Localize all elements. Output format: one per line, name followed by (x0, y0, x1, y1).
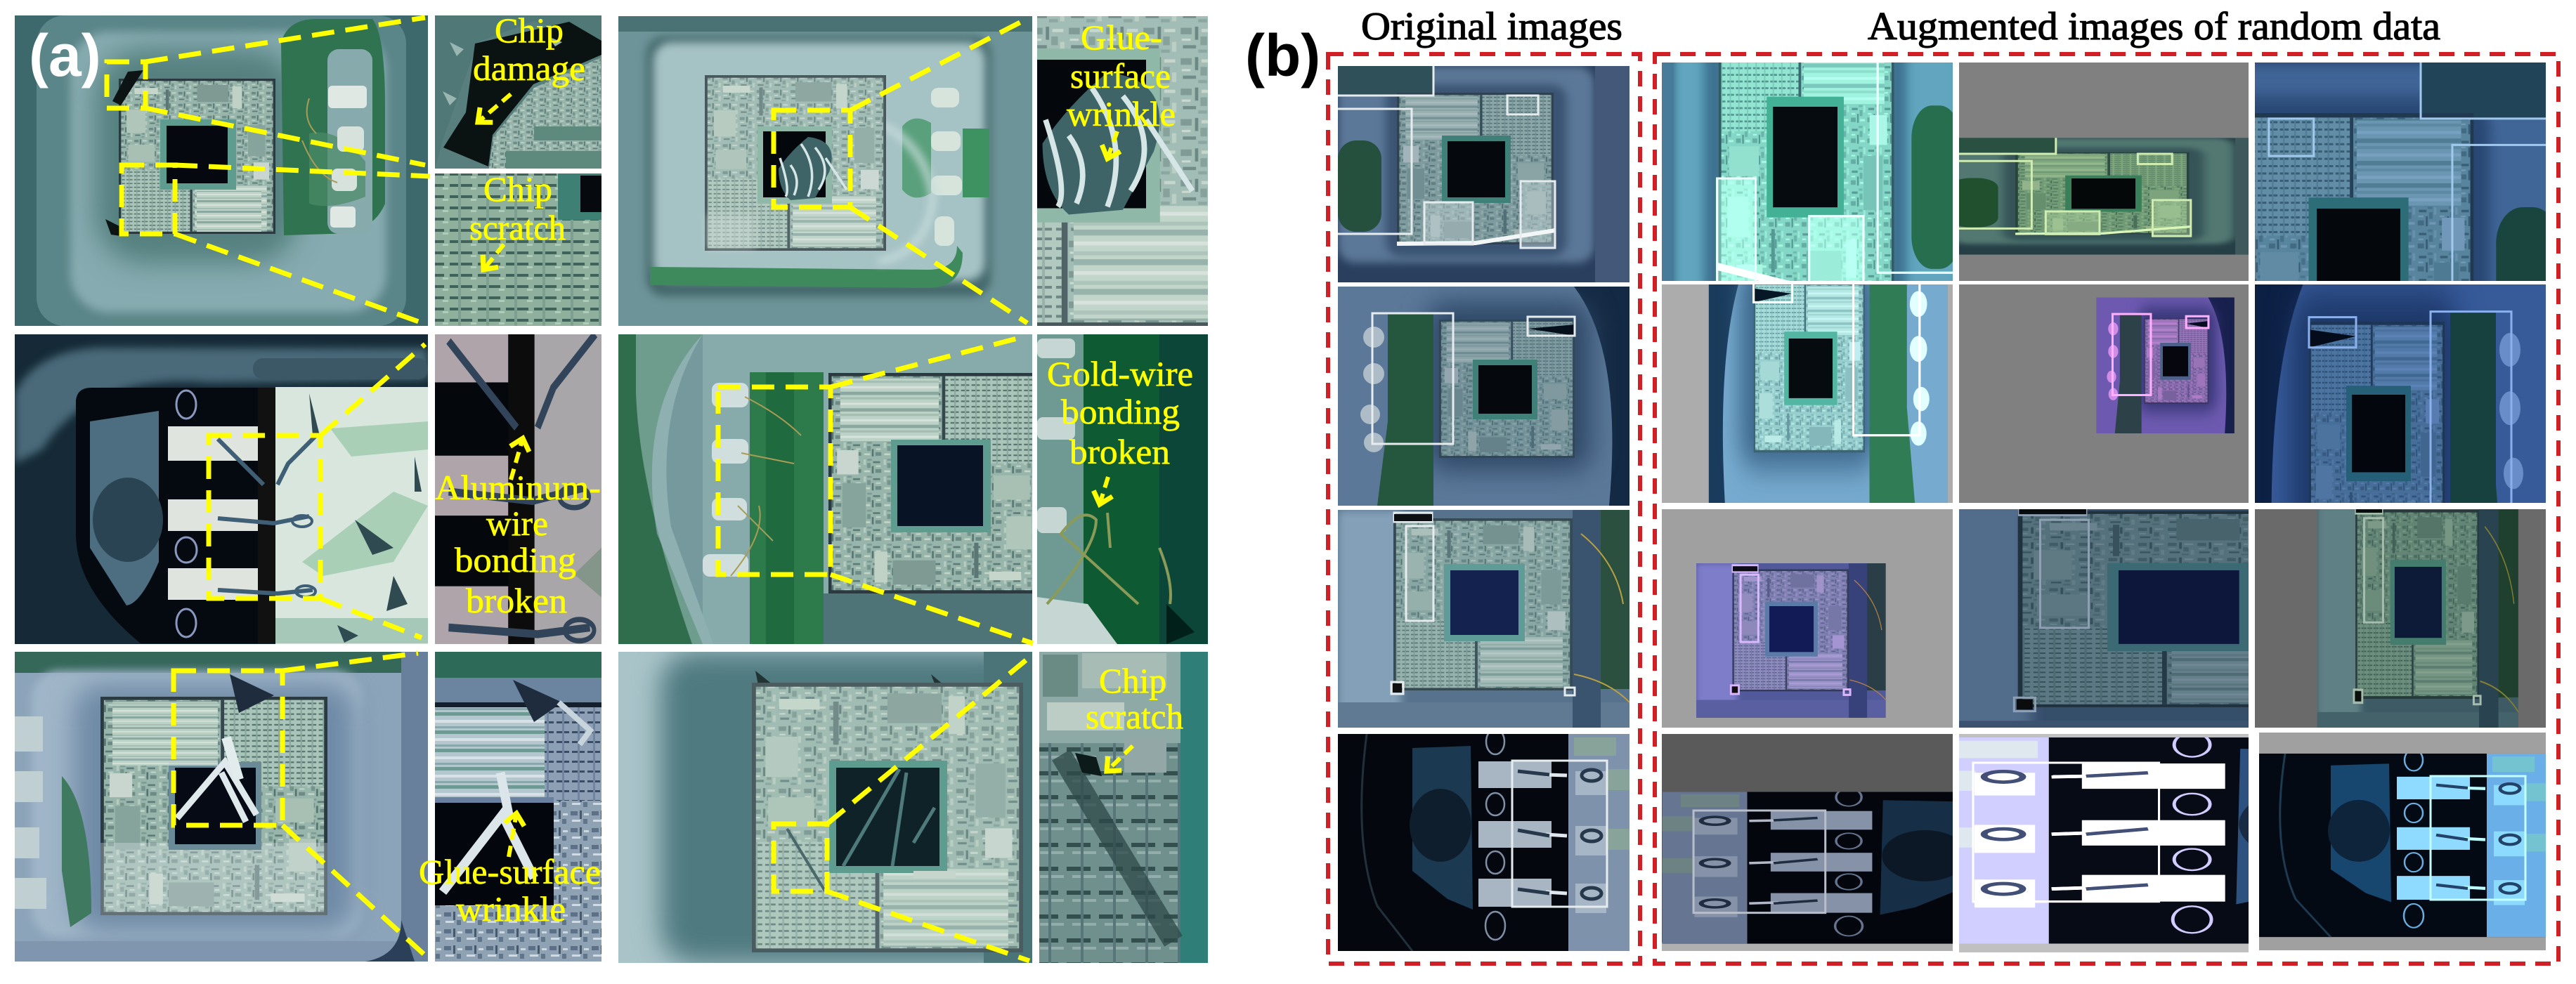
heading: Augmented images of random data: Augmented images of random data (1868, 5, 2440, 48)
original image row 2 (1338, 287, 1629, 506)
annotation: Glue-surface wrinkle right: wrinkle (1067, 94, 1176, 133)
annotation: Chip scratch right: scratch (1086, 697, 1183, 736)
panel (a) row 1 right: glue surface overview (618, 16, 1032, 326)
original image row 4 (1338, 734, 1629, 951)
augmented image row 3 col 1 (1662, 509, 1953, 728)
augmented image row 4 col 3 (2259, 733, 2546, 950)
annotation: Gold-wire bonding broken: Gold-wire (1047, 354, 1193, 393)
annotation: Chip scratch: scratch (469, 208, 566, 247)
zoom lines: right chip scratch box (774, 660, 1029, 961)
annotation: Chip damage (473, 11, 585, 88)
dashed frame: augmented images (1655, 54, 2558, 964)
annotation: Chip scratch: Chip (483, 169, 552, 209)
zoom lines: gold wire box (718, 337, 1033, 643)
inset: aluminum wire zoom (435, 334, 601, 644)
inset: chip scratch zoom right (1039, 652, 1208, 963)
augmented image row 2 col 1 (1662, 284, 1953, 503)
inset: chip scratch zoom (435, 173, 601, 326)
original image row 3 (1338, 510, 1629, 728)
zoom lines: glue surface box (174, 653, 427, 957)
panel (a) row 3 left: glue surface overview (15, 652, 428, 962)
annotation: Gold-wire bonding broken (1047, 354, 1193, 471)
inset: chip damage zoom (435, 15, 601, 169)
augmented image row 4 col 1 (1662, 734, 1953, 951)
augmented image row 2 col 2 (1959, 284, 2249, 503)
arrow: aluminum wire (511, 438, 523, 480)
annotation: Aluminum-wire bonding broken: bonding (455, 540, 576, 579)
augmented image row 1 col 3 (2255, 63, 2546, 281)
panel (a) row 1 left: chip damage overview (15, 15, 428, 326)
arrow: right glue surface (1107, 131, 1117, 159)
augmented image row 2 col 3 (2255, 284, 2546, 503)
annotation: Chip scratch (469, 169, 566, 247)
heading: Original images: Original images (1361, 5, 1622, 48)
augmented image row 3 col 2 (1959, 509, 2249, 728)
panel (a) row 2 right: gold wire overview (618, 334, 1032, 644)
annotation: Glue-surface wrinkle: Glue-surface (419, 852, 601, 891)
inset: gold wire zoom (1037, 334, 1208, 644)
annotation: Aluminum-wire bonding broken: Aluminum- (435, 468, 601, 507)
label (b): (b) (1245, 22, 1320, 88)
zoom lines: aluminum wire box (209, 344, 425, 638)
arrow: chip damage (478, 94, 511, 122)
annotation: Glue-surface wrinkle: wrinkle (456, 889, 566, 929)
panel (a) row 2 left: aluminum wire overview (15, 334, 428, 644)
annotation: Glue-surface wrinkle right: Glue- (1081, 18, 1162, 57)
annotation: Chip damage: Chip (495, 11, 564, 50)
augmented image row 1 col 1 (1662, 63, 1953, 281)
annotation: Glue-surface wrinkle (419, 852, 601, 929)
dashed frame: original images (1328, 54, 1640, 964)
annotation: Gold-wire bonding broken: broken (1069, 432, 1170, 471)
augmented image row 1 col 2 (1959, 63, 2249, 281)
annotation: Gold-wire bonding broken: bonding (1061, 392, 1180, 431)
panel (a) row 3 right: chip scratch overview (618, 652, 1032, 963)
annotation: Glue-surface wrinkle right: surface (1070, 56, 1171, 96)
annotation: Chip damage: damage (473, 48, 585, 88)
arrow: glue surface (509, 813, 516, 857)
arrow: right chip scratch (1107, 746, 1133, 771)
annotation: Aluminum-wire bonding broken: broken (466, 581, 567, 620)
label (a): (a) (29, 22, 101, 88)
inset: glue surface zoom (435, 652, 601, 962)
annotation: Chip scratch right (1086, 661, 1183, 736)
arrow: gold wire (1100, 477, 1108, 504)
annotation: Glue-surface wrinkle right (1067, 18, 1176, 133)
annotation: Aluminum-wire bonding broken: wire (486, 504, 548, 543)
augmented image row 3 col 3 (2255, 509, 2546, 728)
zoom lines: right glue surface box (774, 18, 1029, 323)
arrow: chip scratch (483, 244, 504, 270)
augmented image row 4 col 2 (1959, 734, 2249, 952)
inset: glue surface wrinkle zoom (1037, 16, 1208, 326)
annotation: Chip scratch right: Chip (1099, 661, 1166, 700)
zoom lines: chip damage and chip scratch boxes (107, 18, 430, 324)
annotation: Aluminum-wire bonding broken (435, 468, 601, 620)
original image row 1 (1338, 66, 1629, 282)
